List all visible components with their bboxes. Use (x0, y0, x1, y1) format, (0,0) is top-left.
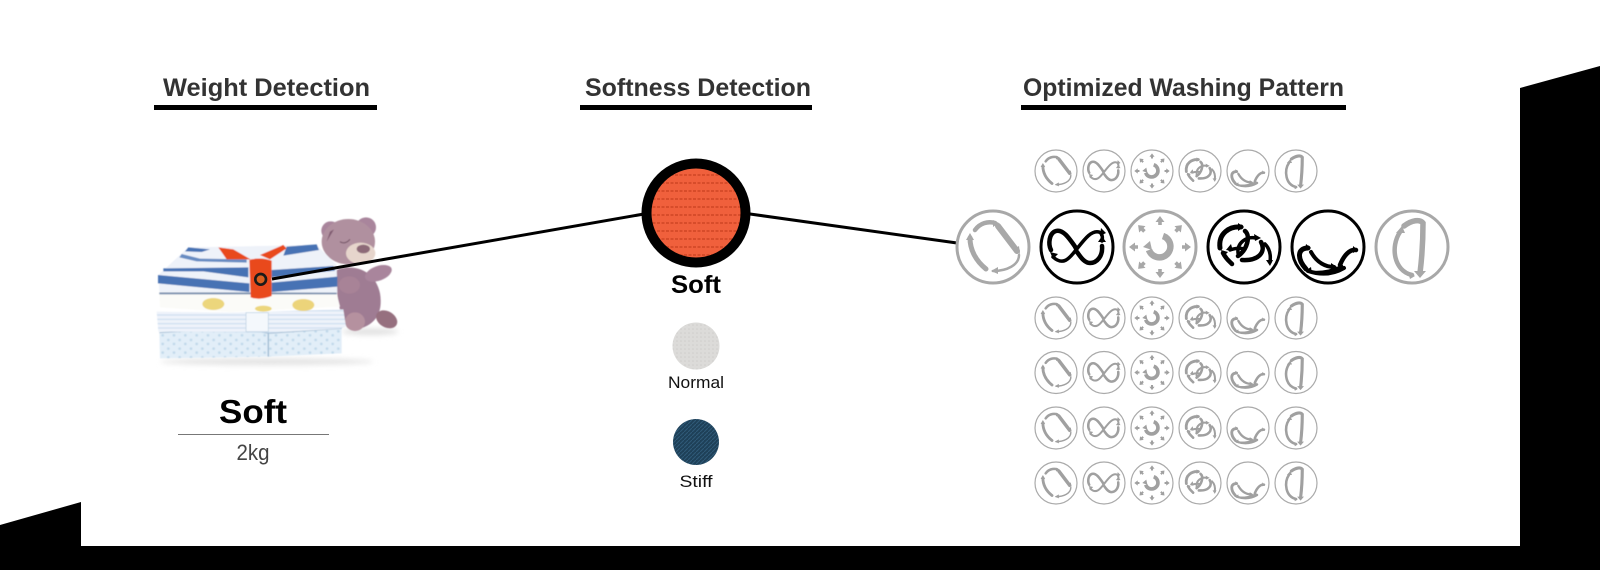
connector line: clothes to softness sensor (272, 214, 644, 279)
soft result label (178, 393, 329, 465)
swatch: stiff navy fabric (673, 419, 719, 491)
swatch: normal grey fabric (668, 322, 724, 392)
connector line: softness sensor to pattern (750, 214, 957, 243)
swatch: soft orange fabric (646, 164, 746, 299)
small pattern row 2 (1035, 297, 1317, 339)
heading: Softness Detection: Softness Detection (585, 74, 811, 102)
sensor ring on shirt (255, 274, 266, 285)
selected washing pattern row (957, 211, 1448, 283)
soft result label: Soft (219, 393, 287, 430)
yellow dotted garment (159, 293, 340, 312)
photo: folded baby clothes and teddy bear (157, 217, 400, 365)
third garment (157, 309, 346, 333)
small pattern row 4 (1035, 407, 1317, 449)
swatch: soft orange fabric: Soft (671, 271, 722, 299)
teddy bear (321, 217, 400, 332)
small pattern row 1 (1035, 150, 1317, 192)
small pattern row 5 (1035, 462, 1317, 504)
orange placket and collar (218, 245, 287, 299)
bottom garment (159, 328, 342, 358)
soft result label: 2kg (236, 440, 270, 465)
swatch: stiff navy fabric: Stiff (680, 472, 713, 491)
heading: Optimized Washing Pattern: Optimized Washing Pattern (1023, 74, 1344, 102)
small pattern row 3 (1035, 352, 1317, 394)
striped shirt (158, 245, 337, 293)
heading: Weight Detection: Weight Detection (163, 74, 370, 102)
swatch: normal grey fabric: Normal (668, 373, 724, 392)
